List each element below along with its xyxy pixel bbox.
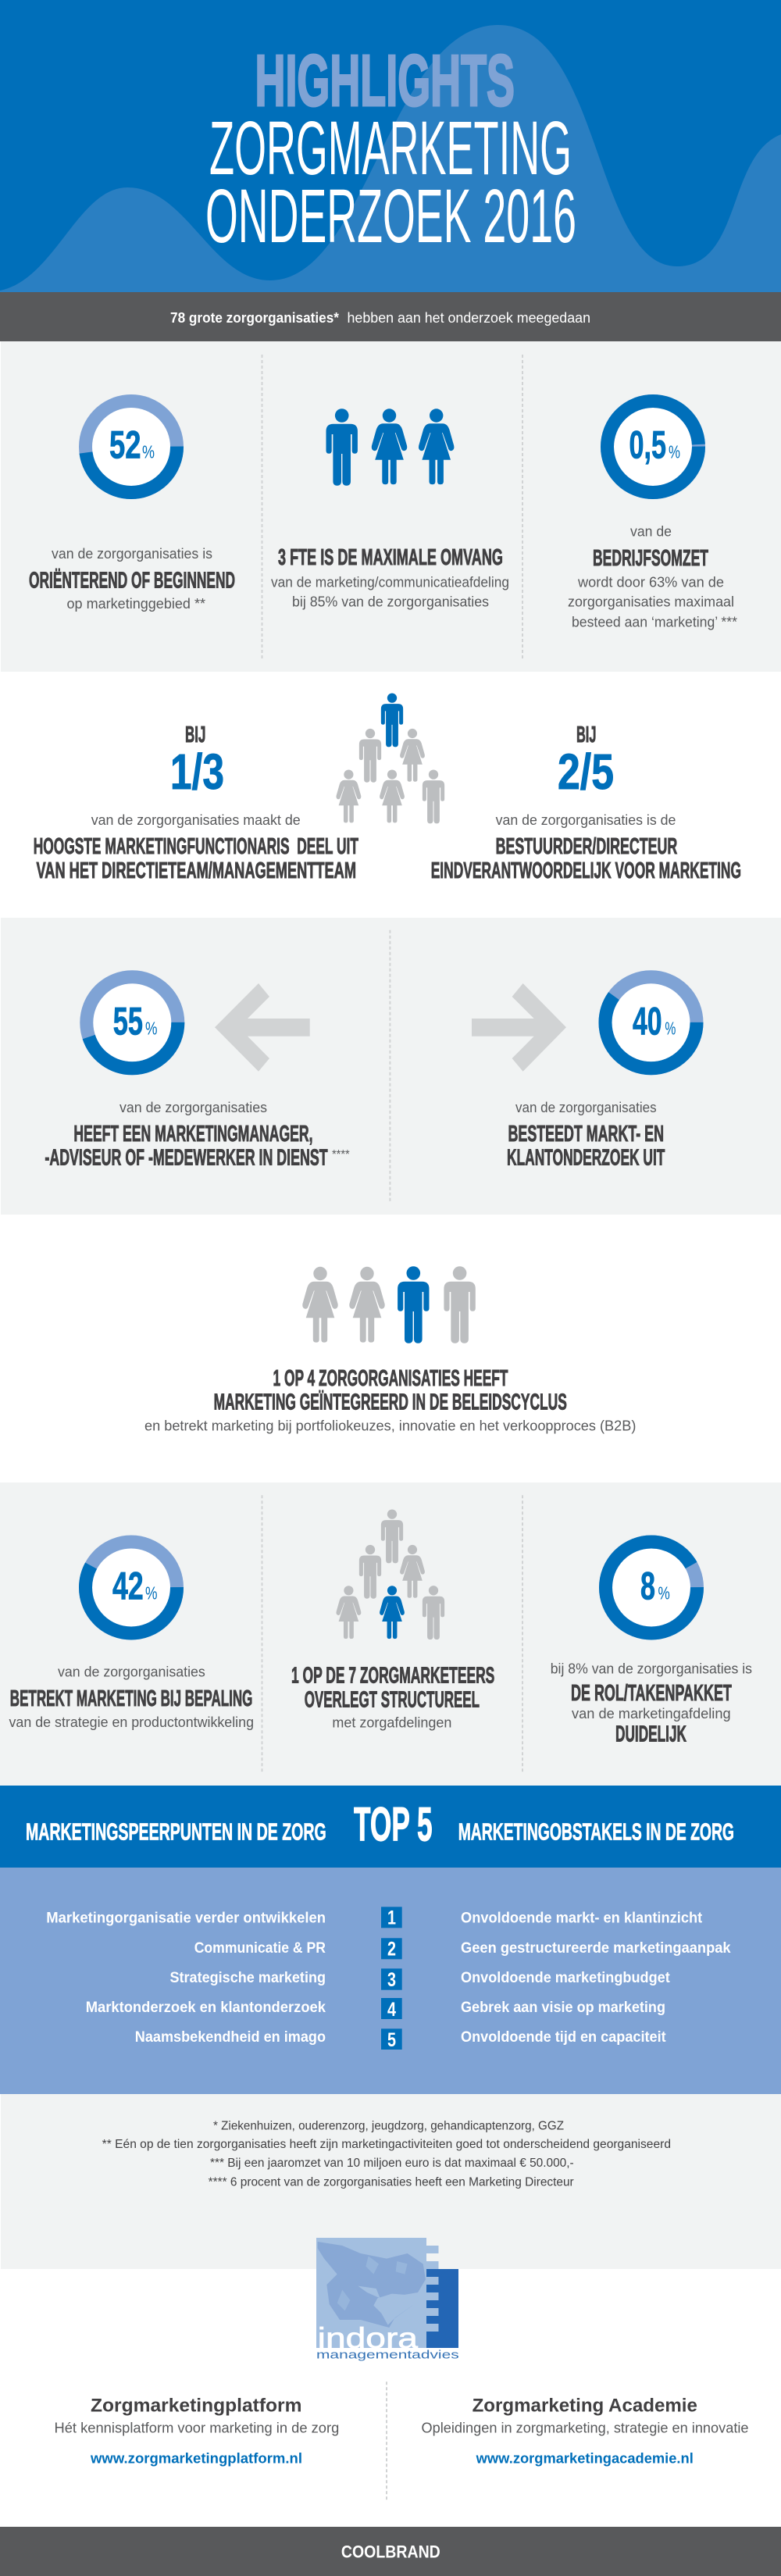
- text: marketingmanager: [45, 1100, 350, 1170]
- intro band: [0, 292, 781, 341]
- text: marketingmanager: -ADVISEUR OF -MEDEWERKER IN DIENST: [45, 1145, 328, 1170]
- text: bedrijfsomzet: wordt door 63% van de: [577, 575, 724, 590]
- donut 0,5 percent: %: [669, 442, 680, 462]
- text: 2/5 bestuurder: van de zorgorganisaties is de: [496, 812, 676, 828]
- ranking numbers: 2: [387, 1939, 396, 1961]
- text: beleidscyclus: 1 OP 4 ZORGORGANISATIES HEEFT: [273, 1366, 508, 1391]
- text: 1/3 directieteam: HOOGSTE MARKETINGFUNCTIONARIS DEEL UIT: [34, 834, 358, 859]
- panel: 1 op 4: [0, 1215, 781, 1482]
- block: zorgmarketing academie: Opleidingen in zorgmarketing, strategie en innovatie: [422, 2420, 748, 2435]
- text: orienterend: van de zorgorganisaties is: [52, 546, 212, 562]
- donut 40 percent: 40: [633, 999, 662, 1043]
- donut 55 percent: %: [145, 1018, 158, 1038]
- text: 2/5 bestuurder: BESTUURDER/DIRECTEUR: [496, 834, 677, 859]
- text: bepaling: van de strategie en productontwikkeling: [9, 1714, 254, 1730]
- text: zorgmarketeers: met zorgafdelingen: [332, 1715, 451, 1731]
- list: speerpunten: Marketingorganisatie verder ontwikkelen: [46, 1911, 326, 1927]
- top 5 header: [0, 1786, 781, 1868]
- block: zorgmarketingplatform: Hét kennisplatform voor marketing in de zorg: [55, 2420, 339, 2435]
- text: beleidscyclus: [144, 1366, 636, 1434]
- footnote 3: *** Bij een jaaromzet van 10 miljoen euro is dat maximaal € 50.000,-: [210, 2157, 574, 2170]
- list: speerpunten: Naamsbekendheid en imago: [135, 2029, 326, 2046]
- donut 0,5 percent: [608, 401, 698, 492]
- title: highlights: HIGHLIGHTS: [255, 40, 515, 121]
- text: markt- en klantonderzoek: KLANTONDERZOEK UIT: [507, 1145, 665, 1170]
- text: 1/3 directieteam: BIJ: [185, 722, 205, 747]
- list: obstakels: Geen gestructureerde marketingaanpak: [461, 1940, 731, 1957]
- footer brand: COOLBRAND: [341, 2542, 440, 2562]
- text: beleidscyclus: en betrekt marketing bij portfoliokeuzes, innovatie en het verkoopproces (B2B): [144, 1418, 636, 1434]
- text: beleidscyclus: MARKETING GEÏNTEGREERD IN DE BELEIDSCYCLUS: [214, 1390, 567, 1415]
- text: 2/5 bestuurder: BIJ: [576, 722, 596, 747]
- text: marketingmanager: van de zorgorganisaties: [119, 1100, 267, 1115]
- text: rol en takenpakket: bij 8% van de zorgorganisaties is: [551, 1661, 752, 1676]
- text: bedrijfsomzet: BEDRIJFSOMZET: [593, 546, 708, 571]
- text: bedrijfsomzet: van de: [630, 524, 672, 540]
- panel: three key stats: [1, 341, 781, 672]
- donut 42 percent: 42: [112, 1564, 144, 1607]
- ranking numbers: 3: [387, 1969, 396, 1991]
- footer band: [0, 2527, 781, 2576]
- text: zorgmarketeers: [291, 1664, 494, 1731]
- text: 1/3 directieteam: VAN HET DIRECTIETEAM/MANAGEMENTTEAM: [36, 858, 356, 883]
- list: speerpunten: Marktonderzoek en klantonderzoek: [86, 2000, 326, 2016]
- list: obstakels: Onvoldoende markt- en klantinzicht: [461, 1911, 703, 1927]
- donut 8 percent: %: [658, 1582, 670, 1603]
- donut 42 percent: [86, 1542, 177, 1633]
- donut 55 percent: 55: [113, 999, 143, 1043]
- text: 2/5 bestuurder: 2/5: [558, 744, 614, 800]
- header panel: [0, 0, 781, 293]
- logo: indora managementadvies: managementadvies: [316, 2348, 459, 2362]
- heading: top 5: TOP 5: [354, 1798, 433, 1851]
- icon: people pyramid, one woman highlighted: [336, 1509, 444, 1639]
- list: speerpunten: [46, 1911, 326, 2046]
- panel: 42, 1 op 7 and 8 percent: [0, 1482, 781, 1786]
- text: orienterend: [29, 546, 235, 612]
- icon: four people, one highlighted: [302, 1266, 476, 1343]
- text: 1/3 directieteam: van de zorgorganisaties maakt de: [91, 812, 301, 828]
- text: marketingmanager: HEEFT EEN MARKETINGMANAGER,: [73, 1122, 313, 1147]
- donut 0,5 percent: 0,5: [629, 423, 666, 467]
- ranking numbers: 1: [387, 1907, 396, 1929]
- panel: 55 and 40 percent: [1, 918, 781, 1215]
- list: obstakels: [461, 1911, 731, 2046]
- donut 42 percent: %: [145, 1582, 158, 1603]
- intro text regular: hebben aan het onderzoek meegedaan: [347, 310, 590, 326]
- text: zorgmarketeers: 1 OP DE 7 ZORGMARKETEERS: [291, 1664, 494, 1689]
- text: markt- en klantonderzoek: [507, 1100, 665, 1170]
- text: bedrijfsomzet: zorgorganisaties maximaal: [568, 594, 734, 610]
- text: markt- en klantonderzoek: BESTEEDT MARKT- EN: [508, 1122, 664, 1147]
- panel: one in three and two in five: [0, 672, 781, 918]
- text: orienterend: op marketinggebied **: [67, 596, 205, 612]
- text: bedrijfsomzet: besteed aan ‘marketing’ ***: [572, 615, 737, 630]
- panel: footnotes: [1, 2094, 781, 2269]
- arrow: left: [215, 983, 310, 1072]
- text: bepaling: van de zorgorganisaties: [58, 1664, 205, 1680]
- text: 3 fte: 3 FTE IS DE MAXIMALE OMVANG: [278, 545, 503, 570]
- block: zorgmarketingplatform: Zorgmarketingplatform: [91, 2396, 301, 2417]
- text: 3 fte: [271, 545, 509, 610]
- block: zorgmarketing academie: www.zorgmarketingacademie.nl: [476, 2450, 694, 2466]
- text: zorgmarketeers: OVERLEGT STRUCTUREEL: [305, 1687, 480, 1712]
- icon: people pyramid, top highlighted: [336, 693, 444, 823]
- text: marketingmanager: ****: [332, 1148, 350, 1161]
- block: zorgmarketing academie: [422, 2396, 748, 2466]
- text: bedrijfsomzet: [568, 524, 737, 630]
- list: obstakels: Gebrek aan visie op marketing: [461, 2000, 665, 2016]
- donut 52 percent: [86, 401, 177, 492]
- ranking numbers: 4: [387, 1999, 396, 2021]
- text: 2/5 bestuurder: [431, 722, 741, 883]
- block: zorgmarketingplatform: www.zorgmarketingplatform.nl: [90, 2450, 302, 2466]
- list: speerpunten: Communicatie & PR: [194, 1940, 326, 1957]
- donut 8 percent: 8: [640, 1564, 655, 1607]
- donut 55 percent: [87, 977, 178, 1069]
- text: 1/3 directieteam: 1/3: [170, 744, 224, 800]
- panel: top 5 lists: [0, 1868, 781, 2094]
- list: speerpunten: Strategische marketing: [170, 1970, 326, 1986]
- heading: marketingspeerpunten: MARKETINGSPEERPUNTEN IN DE ZORG: [26, 1818, 326, 1845]
- list: obstakels: Onvoldoende tijd en capaciteit: [461, 2029, 666, 2046]
- ranking numbers: [381, 1907, 402, 2051]
- text: 3 fte: van de marketing/communicatieafdeling: [271, 575, 509, 590]
- list: obstakels: Onvoldoende marketingbudget: [461, 1970, 670, 1986]
- logo: indora managementadvies: indora: [318, 2322, 419, 2354]
- donut 52 percent: %: [142, 442, 155, 462]
- background hills: [0, 25, 781, 293]
- logo: indora managementadvies: [316, 2238, 459, 2362]
- text: 1/3 directieteam: [34, 722, 358, 883]
- donut 40 percent: %: [665, 1018, 676, 1038]
- arrow: right: [472, 983, 566, 1072]
- block: zorgmarketingplatform: [55, 2396, 339, 2466]
- intro text bold: 78 grote zorgorganisaties*: [170, 310, 339, 326]
- donut 40 percent: [605, 977, 697, 1069]
- text: rol en takenpakket: van de marketingafdeling: [572, 1706, 731, 1721]
- text: markt- en klantonderzoek: van de zorgorganisaties: [515, 1100, 657, 1115]
- text: bepaling: [9, 1664, 254, 1730]
- text: bepaling: BETREKT MARKETING BIJ BEPALING: [10, 1686, 252, 1711]
- footnote 4: **** 6 procent van de zorgorganisaties heeft een Marketing Directeur: [209, 2175, 574, 2189]
- footnote 2: ** Eén op de tien zorgorganisaties heeft zijn marketingactiviteiten goed tot onderscheidend georganiseerd: [102, 2138, 671, 2151]
- text: rol en takenpakket: [551, 1661, 752, 1746]
- text: rol en takenpakket: DUIDELIJK: [615, 1721, 686, 1746]
- donut 8 percent: [606, 1542, 697, 1633]
- icon: three people: [326, 409, 454, 486]
- donut 52 percent: 52: [109, 423, 141, 467]
- ranking numbers: 5: [387, 2029, 396, 2051]
- text: 3 fte: bij 85% van de zorgorganisaties: [292, 594, 489, 610]
- footnote 1: * Ziekenhuizen, ouderenzorg, jeugdzorg, gehandicaptenzorg, GGZ: [213, 2120, 564, 2133]
- text: orienterend: ORIËNTEREND OF BEGINNEND: [29, 569, 235, 594]
- block: zorgmarketing academie: Zorgmarketing Academie: [473, 2396, 697, 2417]
